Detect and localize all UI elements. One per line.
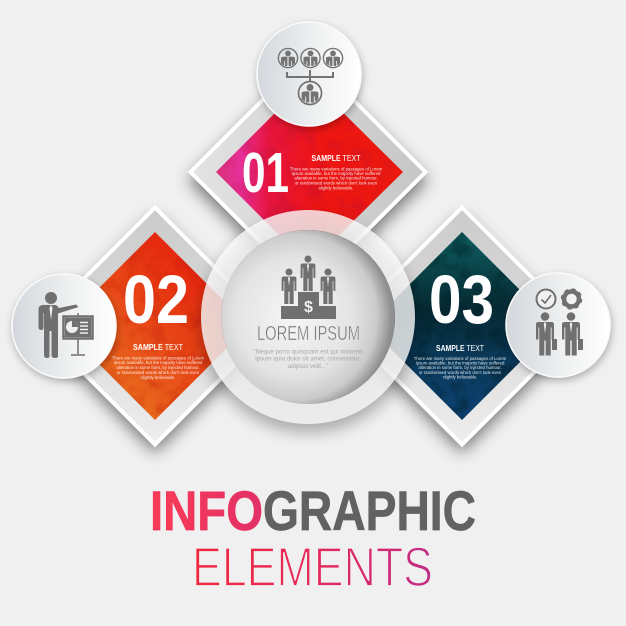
panel: center circle [221, 230, 395, 404]
body 01: slightly believable. [319, 186, 353, 190]
heading 03: SAMPLE TEXT [436, 344, 484, 353]
icon: team hierarchy [278, 48, 343, 105]
quote text: adipisci velit..." [288, 363, 328, 370]
disc left [12, 274, 116, 378]
frame 01 [190, 54, 426, 290]
ring shadow [201, 218, 415, 432]
icon: presenter with chart board [38, 292, 92, 358]
disc right [506, 273, 610, 377]
number 01: 01 [242, 141, 289, 205]
title: infographic: INFO [150, 479, 263, 542]
panel: top icon circle [257, 22, 361, 126]
frame 03 [344, 208, 580, 444]
body 03: slightly believable. [443, 374, 477, 380]
panel: diamond 02 [36, 208, 274, 444]
body 02 [112, 356, 205, 380]
watercolor 02 [61, 232, 249, 420]
body 01: There are many variations of passages of Lorem [290, 166, 383, 172]
quote text: ipsum quia dolor sit amet, consectetur, [255, 356, 361, 362]
body 03: Ipsum available, but the majority have suffered [416, 360, 505, 366]
icon: podium with three people [281, 255, 336, 319]
quote text: "Neque porro quisquam est qui dolorem [253, 348, 363, 356]
body 03 [414, 356, 507, 380]
body 02: Ipsum available, but the majority have suffered [114, 360, 203, 365]
body 02: alteration in some form, by injected humour, [116, 365, 200, 370]
title: infographic [150, 479, 476, 542]
heading: lorem ipsum: LOREM IPSUM [257, 322, 360, 345]
heading 02: SAMPLE TEXT [133, 343, 183, 352]
center disc [221, 230, 395, 404]
body 03: alteration in some form, by injected humour, [418, 365, 502, 370]
watercolor 01 [216, 79, 403, 265]
panel: right icon circle [506, 273, 610, 377]
watercolor 03 [368, 232, 556, 420]
body 01 [290, 166, 383, 190]
icon: podium with three people: $ [304, 299, 313, 316]
quote text [253, 348, 363, 370]
frame 02 [36, 208, 274, 444]
body 01: alteration in some form, by injected humour, [294, 176, 378, 180]
panel: left icon circle [12, 274, 116, 378]
title: infographic: GRAPHIC [263, 479, 476, 542]
body 03: or randomised words which don't look even [419, 370, 502, 375]
center ring [201, 210, 415, 424]
disc top [257, 22, 361, 126]
number 03: 03 [429, 261, 494, 338]
icon: two businessmen with clock and gear [536, 290, 583, 356]
body 01: or randomised words which don't look even [295, 180, 378, 186]
body 01: Ipsum available, but the majority have suffered [292, 171, 381, 176]
number 02: 02 [123, 261, 189, 338]
panel: diamond 03 [344, 208, 580, 444]
heading 01: SAMPLE TEXT [312, 154, 360, 163]
body 03: There are many variations of passages of Lorem [414, 356, 507, 361]
diamond shadows [36, 60, 581, 453]
body 02: slightly believable. [141, 375, 175, 380]
body 02: There are many variations of passages of Lorem [112, 356, 205, 360]
body 02: or randomised words which don't look even [117, 370, 200, 375]
subtitle: elements: ELEMENTS [192, 535, 433, 598]
panel: diamond 01 [190, 54, 426, 290]
